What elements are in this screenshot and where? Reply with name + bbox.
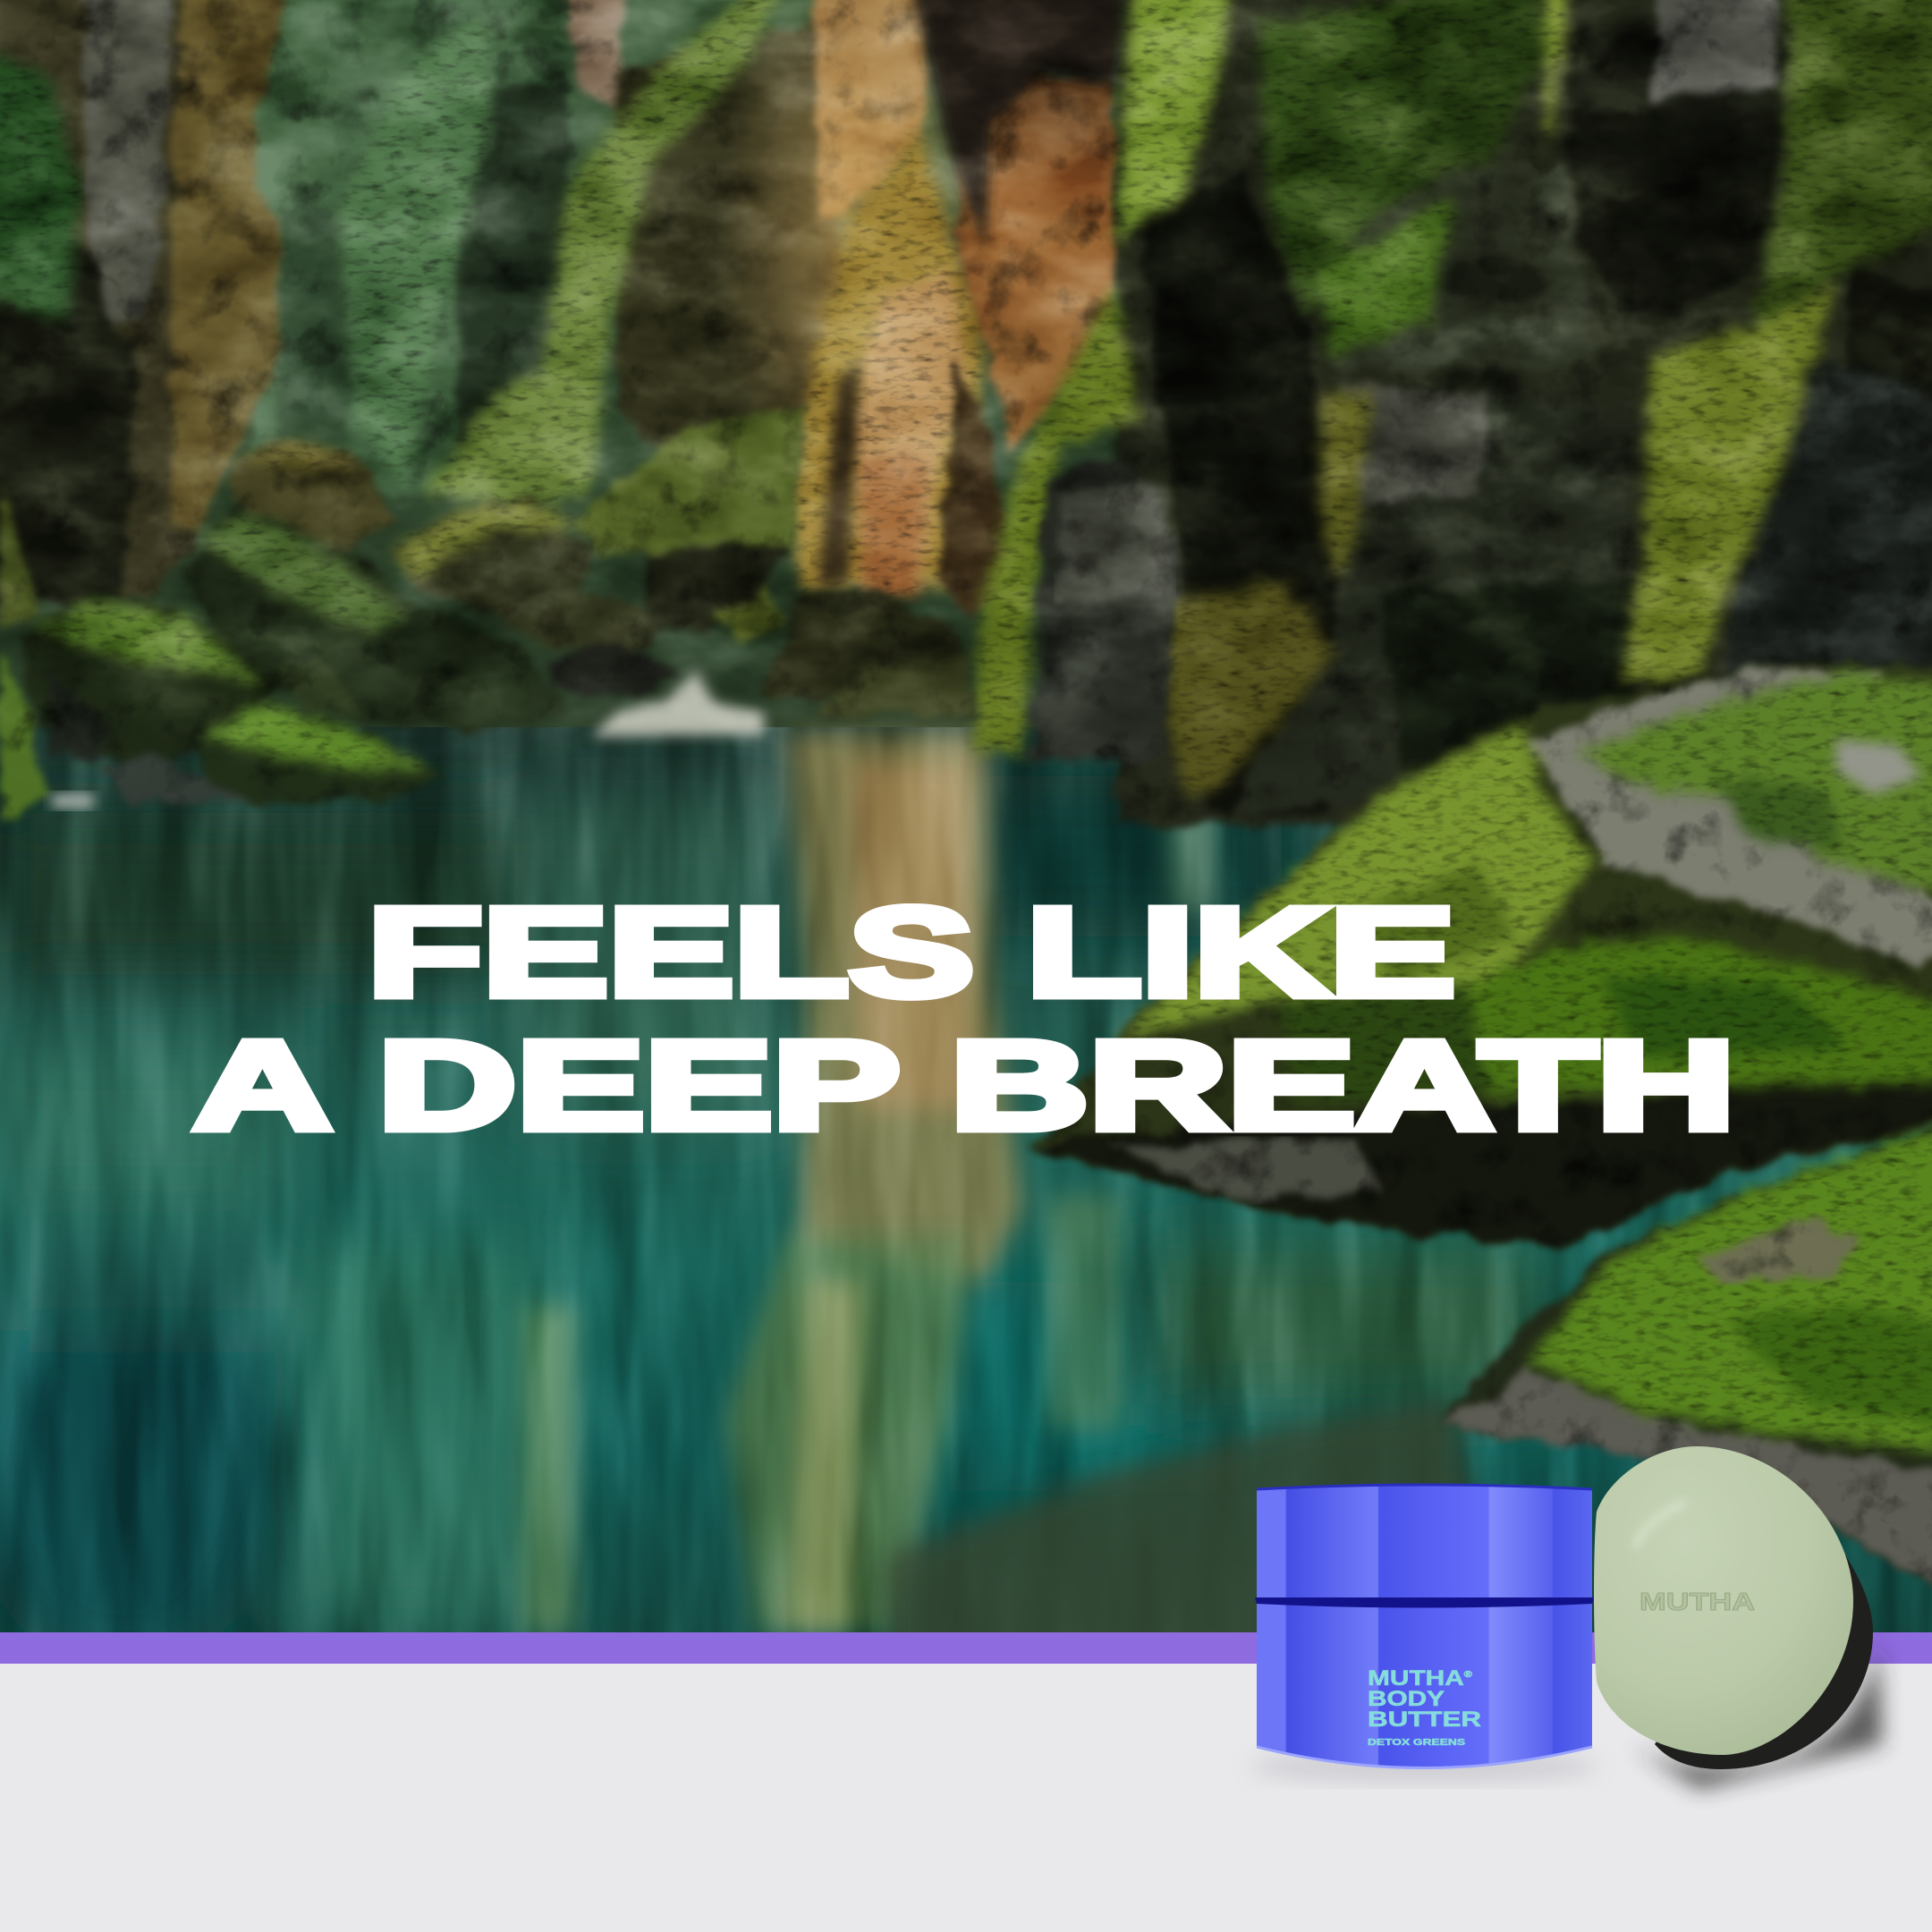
water: [0, 727, 1932, 1675]
grey rock column: [1029, 456, 1177, 764]
orange canyon wall: [939, 74, 1127, 616]
soap body: [1594, 1446, 1853, 1755]
moss on right cliff: [1115, 0, 1932, 795]
golden glow: [715, 0, 1011, 542]
product: soap bar: [1594, 1446, 1882, 1789]
underwater rock shadow: [877, 1397, 1481, 1632]
headline line 2: A DEEP BREATH: [193, 1014, 1735, 1156]
soap dish: [1655, 1512, 1873, 1769]
headline: [193, 881, 1735, 1156]
moss rock column beside gorge: [973, 284, 1140, 751]
label: body: BODY: [1368, 1687, 1445, 1711]
boulders: [0, 407, 973, 819]
soap embossed logo: MUTHA: [1640, 1588, 1755, 1615]
soap drop shadow: [1628, 1592, 1882, 1789]
ferns and mossy curtain: [339, 0, 789, 505]
headline line 1: FEELS LIKE: [368, 881, 1455, 1022]
far canyon wall: [252, 0, 930, 493]
jar seam: [1255, 1597, 1594, 1608]
jar base: [1257, 1601, 1592, 1767]
jar bottom rim highlight: [1257, 1747, 1592, 1767]
purple accent band: [0, 1632, 1932, 1664]
soap highlight: [1635, 1503, 1686, 1547]
jar lid: [1257, 1485, 1592, 1597]
label: detox greens: DETOX GREENS: [1368, 1737, 1465, 1748]
big foreground mossy boulder: [1029, 659, 1932, 1247]
waterfall: [591, 672, 764, 737]
golden rock column: [789, 130, 986, 597]
moss tops on boulders: [30, 441, 579, 770]
jar shadow: [1250, 1750, 1598, 1783]
jar top rim: [1257, 1485, 1592, 1489]
right cliff dark mass: [1115, 0, 1932, 826]
rock mottling overlay: [0, 0, 1932, 789]
canyon backdrop haze: [0, 0, 1125, 727]
label: mutha: MUTHA: [1368, 1666, 1445, 1690]
water streak texture: [0, 727, 1932, 1632]
lower right mossy boulder: [1444, 1115, 1932, 1614]
river stones highlight: [52, 793, 94, 809]
label: mutha: ®: [1464, 1670, 1473, 1680]
jar label: [1368, 1666, 1481, 1748]
left cliff: [0, 0, 290, 604]
product: body butter jar: [1250, 1485, 1598, 1783]
label: butter: BUTTER: [1368, 1707, 1481, 1732]
left fern: [0, 49, 80, 320]
dark overhang: [910, 0, 1146, 247]
cave gap in golden column: [818, 357, 860, 585]
